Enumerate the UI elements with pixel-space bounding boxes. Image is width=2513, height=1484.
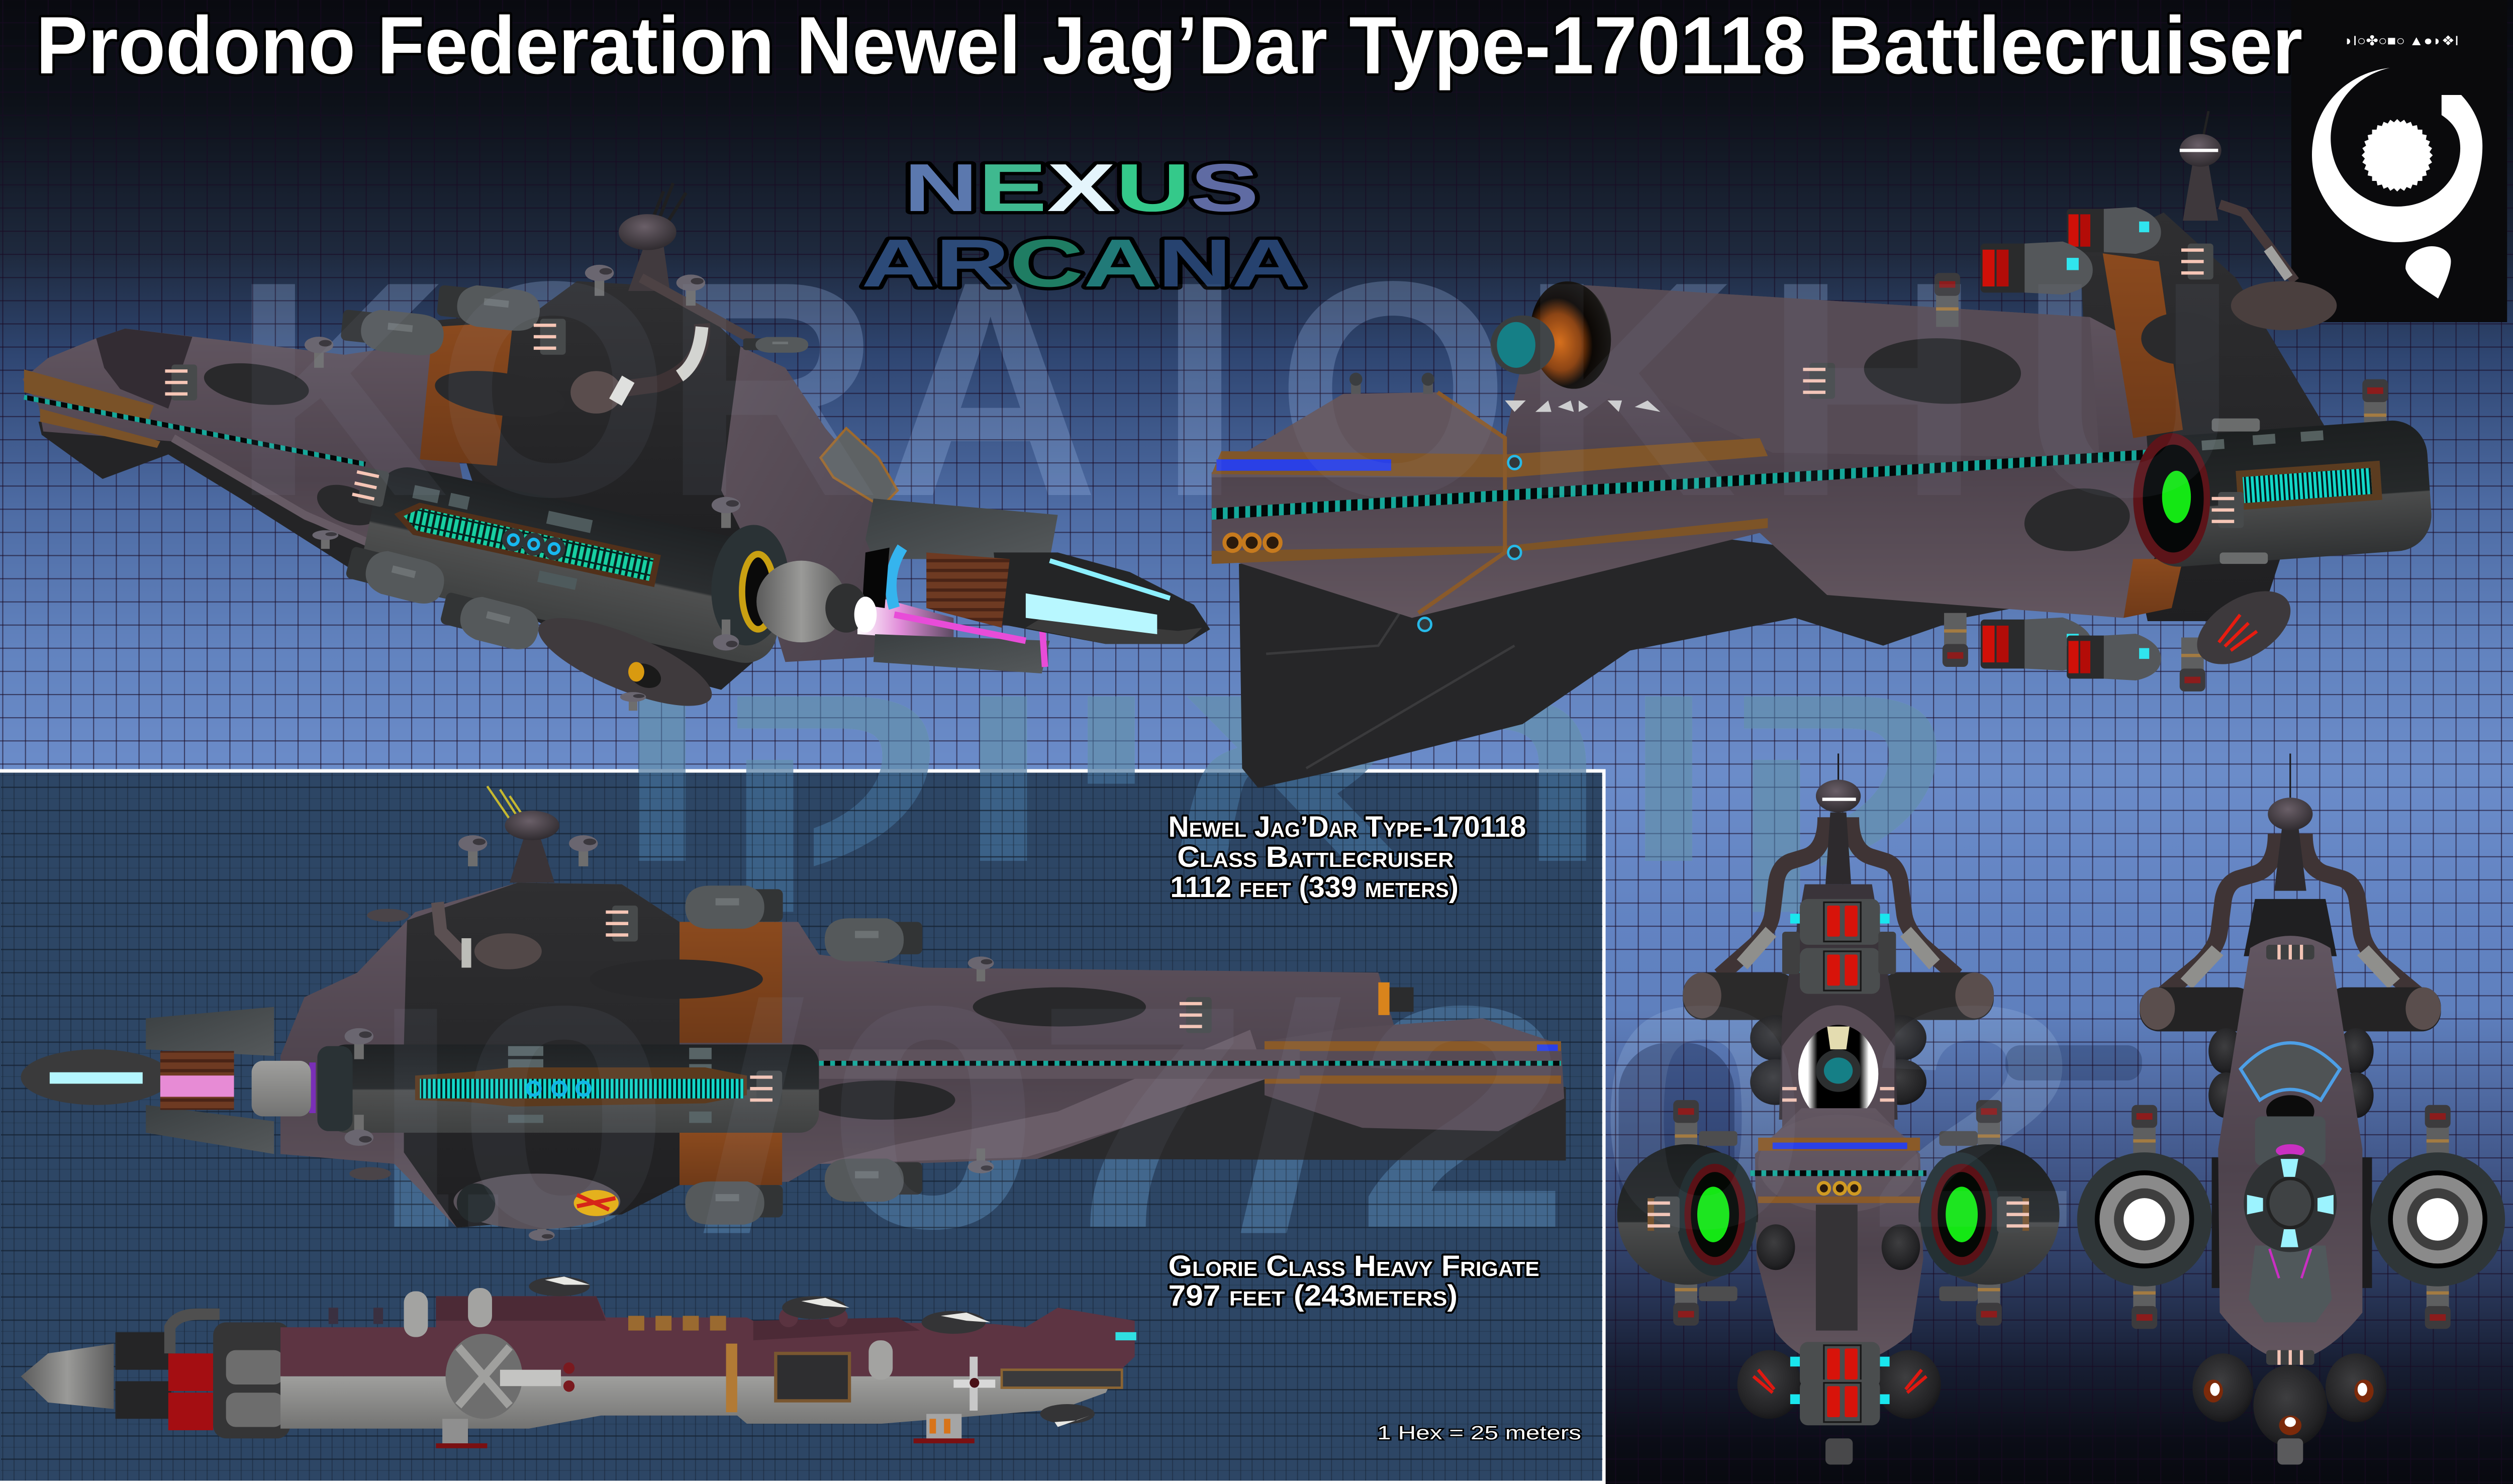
ship: perspective view left	[23, 183, 1210, 723]
label: battlecruiser spec: Class Battlecruiser	[1177, 841, 1454, 873]
nose cone	[994, 552, 1210, 644]
orange stripe	[726, 1344, 737, 1412]
forward block	[1265, 1018, 1564, 1131]
engine black	[2143, 445, 2204, 552]
logo panel: ◗I○✤○■○ ▲●◗❖I	[2344, 33, 2459, 48]
watermark: name and date behind ships	[232, 218, 2237, 1294]
magenta trim	[2269, 1249, 2311, 1278]
engines	[116, 1322, 290, 1438]
gun bars	[2266, 945, 2314, 959]
bottom stub	[2277, 1438, 2303, 1464]
neck	[2274, 826, 2306, 891]
main hull	[1212, 284, 2156, 618]
lower orange band	[680, 1131, 782, 1185]
cannon lens	[1497, 322, 1535, 368]
gold lights	[1224, 535, 1281, 551]
orange upper band	[1212, 438, 1768, 477]
antenna	[1838, 753, 1839, 781]
watermark overlay across ships: 10/07/202	[293, 940, 2082, 1294]
orange rear band upper	[2103, 253, 2183, 438]
mast	[487, 786, 559, 882]
hull dorsal shadow	[96, 329, 192, 409]
mast ball	[1816, 779, 1861, 813]
frigate nose cone	[21, 1344, 114, 1409]
bright arch	[1798, 1025, 1878, 1123]
nacelle window	[415, 1067, 747, 1107]
dark center strip	[1816, 1205, 1858, 1331]
orange lower band	[1212, 518, 1768, 564]
upper body	[1779, 884, 1898, 1120]
teal line	[24, 397, 365, 464]
upper block	[753, 1318, 920, 1340]
dorsal turrets	[305, 265, 808, 368]
inset panel: scale comparison: קוראיוקו	[608, 616, 1956, 919]
exhaust pipe	[170, 1314, 220, 1353]
pod eye	[574, 1190, 619, 1216]
nacelle tabs	[2212, 419, 2268, 564]
cross tubes	[1683, 972, 1994, 1020]
thruster ring	[2268, 1178, 2312, 1228]
lens core	[1824, 1057, 1853, 1083]
nacelle	[357, 461, 795, 669]
arch body	[1782, 1005, 1894, 1128]
inset panel: scale comparison: 10/07/2	[293, 940, 1571, 1294]
ship: perspective view right	[1212, 111, 2434, 788]
nacelle aft cap	[317, 1046, 353, 1131]
domes	[779, 1308, 848, 1327]
upper engine wing	[865, 499, 1058, 559]
forward posts	[1349, 373, 1434, 394]
aft nozzle glow	[857, 591, 953, 641]
pipes right	[2304, 834, 2419, 996]
top turrets	[1782, 899, 1896, 994]
dark dome	[404, 882, 680, 1228]
cyan tag	[1115, 1332, 1136, 1340]
gold ring	[742, 554, 774, 629]
ship: side view in panel	[21, 786, 1566, 1241]
ventral turrets	[313, 530, 739, 711]
bottom turrets	[1790, 1342, 1890, 1425]
mast	[2180, 111, 2295, 281]
engine posts	[2132, 1105, 2451, 1329]
nose window	[50, 1072, 143, 1083]
engine ring	[2133, 433, 2210, 564]
nose	[21, 1049, 171, 1105]
orange lower strip	[1758, 1197, 1920, 1203]
center thruster	[2244, 1154, 2337, 1252]
logo panel	[2291, 0, 2507, 322]
barrel caps	[563, 1362, 574, 1392]
cross tubes	[2140, 987, 2441, 1031]
upper maroon hull	[280, 1296, 1135, 1376]
pipes left	[1720, 817, 1825, 976]
ship: front view	[1617, 753, 2060, 1464]
gun boxes	[165, 319, 566, 401]
pod hole	[457, 1183, 495, 1223]
watermark: name and date behind ships: 10/07/202	[293, 940, 2082, 1294]
forward gun	[1180, 997, 1212, 1033]
main body	[2218, 936, 2362, 1360]
nacelle hatches	[401, 482, 593, 590]
upper gray section	[2255, 1117, 2326, 1165]
nacelle window	[391, 498, 661, 587]
upper dark section	[2244, 899, 2337, 956]
forward hull	[23, 324, 553, 608]
bottom pods	[1737, 1350, 1941, 1419]
dark ring	[825, 583, 867, 633]
mast ball	[2268, 798, 2312, 830]
inset panel: scale comparison	[0, 697, 1937, 1484]
white nozzle	[854, 597, 877, 633]
right engine	[1918, 1144, 2060, 1285]
chamfer lines	[1418, 392, 1505, 613]
side stubs	[2212, 1157, 2372, 1288]
lower spheres	[1757, 1224, 1920, 1270]
upper orange band	[420, 322, 513, 466]
teal line	[1212, 449, 2149, 520]
engine green	[2162, 471, 2191, 523]
frigate top domes	[529, 1276, 1095, 1427]
nacelle hatches	[508, 1046, 712, 1123]
pipe and tube	[438, 902, 542, 969]
pod eye	[628, 662, 644, 681]
label: frigate spec: Glorie Class Heavy Frigate	[1169, 1250, 1539, 1282]
pod eye red	[577, 1195, 616, 1210]
gold lights	[1818, 1182, 1860, 1194]
ship: Glorie class frigate	[21, 1276, 1136, 1448]
rear tube	[2231, 281, 2337, 330]
bottom pod	[453, 1173, 620, 1229]
maroon hull shade	[436, 1296, 606, 1321]
nacelle hatches	[2201, 430, 2324, 450]
main hull aft	[280, 882, 1566, 1228]
bottom pods	[2192, 1353, 2386, 1447]
side strip	[819, 1049, 1300, 1079]
slit	[1822, 798, 1856, 801]
arch top glow	[1827, 1027, 1850, 1049]
magenta top	[2276, 1144, 2305, 1157]
frigate head turrets	[329, 1288, 893, 1379]
bottom gun bars	[2266, 1350, 2314, 1365]
hull ellipses	[202, 357, 568, 533]
watermark overlay across ships: KORAIOKHU	[232, 218, 2237, 560]
cyan streak	[1050, 561, 1170, 598]
turrets	[345, 835, 994, 1241]
purple ring	[309, 1062, 316, 1113]
side window	[1002, 1370, 1122, 1388]
aperture	[2266, 1095, 2314, 1128]
lens	[1816, 1049, 1861, 1092]
dark keel	[39, 417, 497, 605]
spheres	[2208, 1028, 2374, 1118]
right engine posts	[1939, 1100, 2002, 1326]
lower gray hull	[280, 1376, 1114, 1429]
spheres	[1750, 1015, 1926, 1105]
lower hull edge	[173, 438, 481, 591]
nacelle	[327, 1044, 819, 1133]
lower engine wing	[874, 634, 1050, 673]
lower wing	[146, 1105, 274, 1154]
lower pod	[529, 601, 721, 723]
hull markings	[1505, 401, 1661, 412]
pod eyes	[2204, 1379, 2374, 1435]
pipes left	[2162, 834, 2276, 996]
fist posts	[1935, 273, 2388, 691]
teal window	[420, 1079, 744, 1099]
Nexus Arcana logo	[861, 150, 1306, 301]
magenta glow	[160, 1075, 234, 1097]
orange strips	[1265, 1041, 1561, 1083]
lower pod	[2185, 576, 2302, 679]
blue strip	[1773, 1143, 1907, 1149]
dish	[1523, 276, 1618, 394]
left engine	[2077, 1152, 2212, 1287]
watermark: name and date behind ships: KORAIOKHU	[232, 218, 2237, 560]
upper gun	[606, 906, 638, 941]
title: Prodono Federation Newel Jag’Dar Type-170118 Battlecruiser	[36, 0, 2302, 90]
forward block shading	[1212, 392, 1510, 477]
cross emblem	[953, 1357, 995, 1411]
arch panel	[2241, 1043, 2340, 1100]
bottom stub	[1825, 1438, 1853, 1464]
teal line	[819, 1061, 1561, 1066]
teal line	[1750, 1170, 1926, 1176]
nacelle	[2137, 418, 2434, 569]
scale note: 1 Hex = 25 meters	[1377, 1422, 1581, 1443]
left engine posts	[1673, 1100, 1737, 1326]
right engine	[2370, 1152, 2505, 1287]
left engine	[1617, 1144, 1758, 1285]
orange tags	[628, 1316, 726, 1331]
front dish glow	[1378, 982, 1414, 1015]
black collar	[862, 548, 890, 608]
orange rear band lower	[2123, 559, 2183, 618]
lower orange band	[420, 561, 510, 608]
window rings	[527, 1082, 590, 1095]
grille window	[776, 1353, 849, 1401]
cyan vents	[2247, 1159, 2334, 1247]
label: frigate spec	[1169, 1250, 1539, 1312]
hull ellipses	[1863, 312, 2225, 556]
pipes right	[1851, 817, 1957, 976]
dark dome	[2080, 213, 2324, 621]
label: battlecruiser spec: Newel Jag’Dar Type-170118	[1169, 811, 1526, 843]
watermark overlay across ships	[232, 218, 2237, 1294]
nacelle top post	[712, 497, 740, 528]
Nexus Arcana logo: N E X U S	[904, 150, 1259, 226]
rear vents	[349, 909, 409, 1180]
dark forward fin	[1037, 1075, 1566, 1160]
ventral dark	[481, 585, 753, 690]
disc	[445, 1334, 523, 1419]
forward orange stripes	[24, 369, 160, 448]
label: battlecruiser spec: 1112 feet (339 meters)	[1170, 871, 1459, 904]
gray cone	[756, 561, 846, 642]
nose shading	[1026, 618, 1202, 644]
barrel	[500, 1370, 561, 1386]
Nexus Arcana logo: AR C A NA	[861, 226, 1306, 301]
dark dome	[420, 281, 761, 556]
cyan window	[1026, 593, 1157, 634]
copper ribs	[926, 552, 1010, 628]
copper ribs	[160, 1051, 234, 1110]
nacelle gun	[750, 1070, 782, 1107]
mast	[570, 183, 753, 414]
label: frigate spec: 797 feet (243meters)	[1169, 1279, 1458, 1312]
upper hull shadow	[1522, 284, 2099, 458]
blue tip	[1537, 1044, 1558, 1051]
aft hull	[721, 347, 898, 662]
blue patch	[1216, 459, 1391, 471]
dark fin	[1239, 523, 2115, 788]
watermark: name and date behind ships: קוראיוקו	[608, 616, 1956, 919]
canopy	[821, 428, 898, 507]
neck	[1825, 813, 1851, 884]
main body	[1755, 1108, 1923, 1365]
red turrets	[1981, 207, 2161, 680]
nacelle window	[2236, 461, 2382, 510]
hull ellipses	[590, 959, 1146, 1120]
gun box	[1803, 363, 1835, 399]
pale diagonal	[819, 1030, 1266, 1164]
gray cone	[252, 1061, 311, 1117]
landing gear	[436, 1414, 975, 1448]
nacelle end cap	[706, 521, 795, 649]
nacelle gun	[2212, 492, 2244, 528]
hull under nacelle	[360, 490, 753, 654]
magenta edges	[894, 615, 1045, 667]
upper orange band	[680, 922, 782, 1043]
ship: rear view	[2077, 753, 2505, 1464]
cannon barrel	[1491, 316, 1555, 374]
gun bars	[1782, 1087, 1894, 1102]
gun box rear	[2181, 244, 2213, 279]
antenna	[2290, 753, 2291, 798]
label: battlecruiser spec	[1169, 811, 1526, 904]
upper wing	[146, 1007, 274, 1056]
lower gray section	[2249, 1245, 2332, 1322]
orange upper strip	[1758, 1138, 1920, 1151]
fin detail	[1266, 572, 1514, 768]
blue ring	[891, 548, 902, 608]
disc cross	[458, 1347, 510, 1406]
nacelle gun box	[351, 465, 390, 508]
body highlight	[1758, 1115, 1918, 1213]
side nodes	[1418, 456, 1521, 631]
